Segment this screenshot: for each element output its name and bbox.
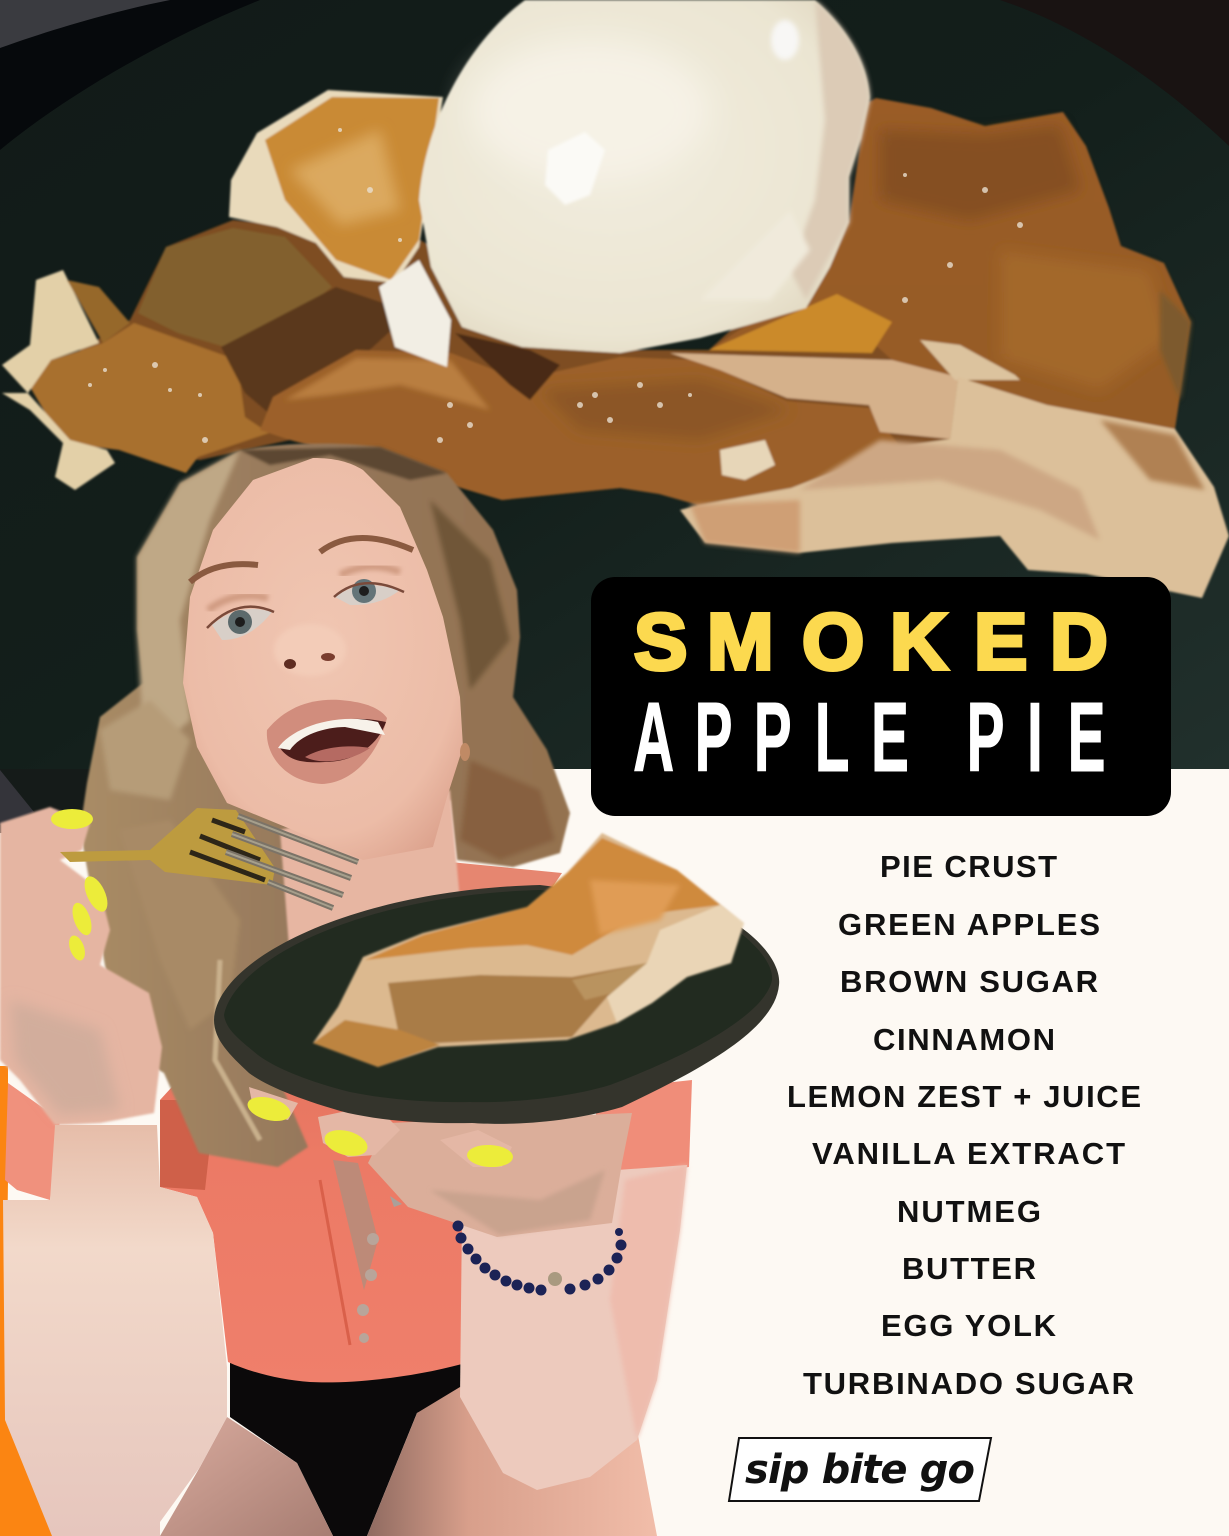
filling <box>388 963 647 1043</box>
title: smoked: SMOKED <box>634 597 1108 686</box>
photo: apple pie with ice cream <box>2 0 1229 598</box>
hand shadow <box>10 1000 120 1115</box>
finger one <box>249 1087 298 1120</box>
ice cream scoop <box>419 0 870 353</box>
yellow nails <box>51 809 514 1168</box>
title box <box>591 577 1171 816</box>
eye right <box>334 567 404 605</box>
logo: sip bite go <box>729 1438 991 1501</box>
white crust chunk in filling <box>720 440 775 480</box>
held plate <box>214 885 779 1124</box>
left caramel piece <box>20 323 269 473</box>
orange top crust <box>365 838 720 960</box>
left sleeve <box>5 1083 60 1200</box>
ingredient: GREEN APPLES <box>838 907 1100 942</box>
finger three <box>440 1130 512 1167</box>
person <box>0 444 779 1536</box>
shirt top by shoulder <box>450 862 562 895</box>
raised hand <box>0 807 162 1125</box>
right sleeve <box>590 1080 692 1178</box>
finger two <box>318 1105 400 1157</box>
ingredient: CINNAMON <box>873 1022 1055 1057</box>
neck <box>280 790 460 960</box>
pale crust edge <box>607 905 744 1023</box>
face <box>183 458 470 860</box>
right caramel mass <box>709 98 1191 429</box>
hair <box>80 444 570 1167</box>
left thigh <box>160 1417 333 1536</box>
mouth <box>267 700 387 784</box>
earring <box>460 743 470 761</box>
ingredient list <box>787 849 1141 1401</box>
ingredient: LEMON ZEST + JUICE <box>787 1079 1141 1114</box>
background: dark plate photo <box>0 0 1229 833</box>
background: orange strip <box>0 1066 54 1536</box>
pie slice on plate <box>313 833 744 1067</box>
shirt darker panel <box>160 1100 215 1190</box>
orange glaze strip <box>709 294 892 353</box>
ingredient: BUTTER <box>902 1251 1036 1286</box>
shirt placket and buttons <box>320 1160 379 1345</box>
ingredient: PIE CRUST <box>880 849 1057 884</box>
caramel sparkles <box>88 128 1023 443</box>
center caramel <box>260 350 900 505</box>
melted ice cream <box>379 260 451 367</box>
logo: sip bite go: sip bite go <box>745 1447 975 1493</box>
title: apple pie: APPLE PIE <box>633 682 1105 792</box>
crust strip <box>670 353 958 439</box>
ingredient: EGG YOLK <box>881 1308 1057 1343</box>
scoop mauve shade <box>790 0 870 300</box>
left crust fragment <box>2 270 115 490</box>
left crust flap <box>229 90 443 283</box>
eyebrows <box>190 564 258 582</box>
pie base silhouette <box>60 220 1175 510</box>
dark apple <box>221 287 395 427</box>
right forearm <box>460 1165 687 1490</box>
dark wedge under scoop <box>455 333 560 400</box>
right thigh and knee <box>367 1387 657 1536</box>
ingredient: BROWN SUGAR <box>840 964 1098 999</box>
fork <box>60 808 358 908</box>
apple one <box>138 228 332 353</box>
bottom crust <box>680 377 1229 598</box>
eye left <box>207 596 274 640</box>
left forearm <box>3 1125 227 1536</box>
bracelet <box>452 1220 626 1296</box>
shirt <box>160 880 470 1382</box>
ingredient: NUTMEG <box>897 1194 1041 1229</box>
wrist ring <box>390 1196 402 1207</box>
small apple left <box>67 280 130 343</box>
ingredient: TURBINADO SUGAR <box>803 1366 1134 1401</box>
caramel foot <box>313 1020 440 1067</box>
nose <box>274 624 346 676</box>
hand under plate <box>249 1087 632 1237</box>
ingredient: VANILLA EXTRACT <box>812 1136 1125 1171</box>
black shorts <box>230 1350 470 1536</box>
scoop highlights <box>545 132 605 205</box>
